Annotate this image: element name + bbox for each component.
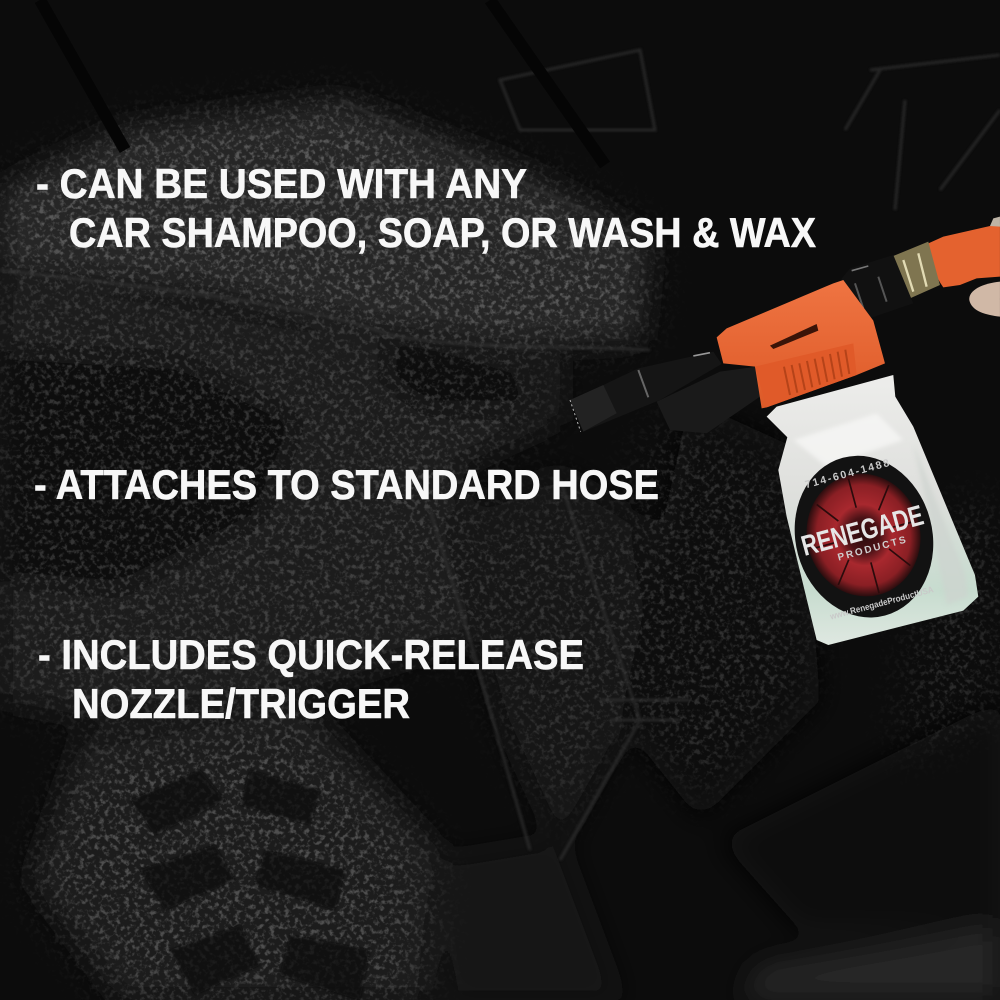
label disc	[777, 440, 951, 633]
foam around nozzle	[657, 367, 760, 433]
feature 3: quick-release nozzle: - INCLUDES QUICK-RELEASE	[38, 631, 584, 678]
feature 3: quick-release nozzle: NOZZLE/TRIGGER	[72, 680, 410, 727]
bottle body	[767, 375, 978, 645]
label website: www.RenegadeProductUSA	[828, 584, 935, 622]
icon: hand at right edge	[969, 282, 1000, 317]
tire tread blocks	[130, 770, 370, 1000]
orange cap and head	[717, 280, 885, 408]
feature list text	[34, 160, 816, 727]
bottle label	[777, 440, 951, 633]
label products: PRODUCTS	[837, 535, 907, 564]
feature 1: shampoo compatibility	[36, 160, 816, 256]
label brand: RENEGADE	[798, 500, 927, 563]
orange trigger handle	[928, 224, 1000, 287]
product: foam cannon bottle sprayer	[570, 217, 1000, 645]
feature 2: standard hose: - ATTACHES TO STANDARD HOSE	[34, 461, 659, 508]
slot window	[770, 324, 818, 349]
label red sunburst	[793, 461, 934, 609]
feature 1: shampoo compatibility: CAR SHAMPOO, SOAP, OR WASH & WAX	[69, 209, 816, 256]
feature 3: quick-release nozzle	[38, 631, 584, 727]
brass quick-connect	[892, 242, 940, 298]
cap ribs	[784, 350, 849, 395]
feature 1: shampoo compatibility: - CAN BE USED WITH ANY	[36, 160, 527, 207]
black nozzle	[570, 352, 722, 432]
label phone number: 714-604-1488	[804, 457, 891, 491]
black hose connector	[842, 255, 913, 322]
